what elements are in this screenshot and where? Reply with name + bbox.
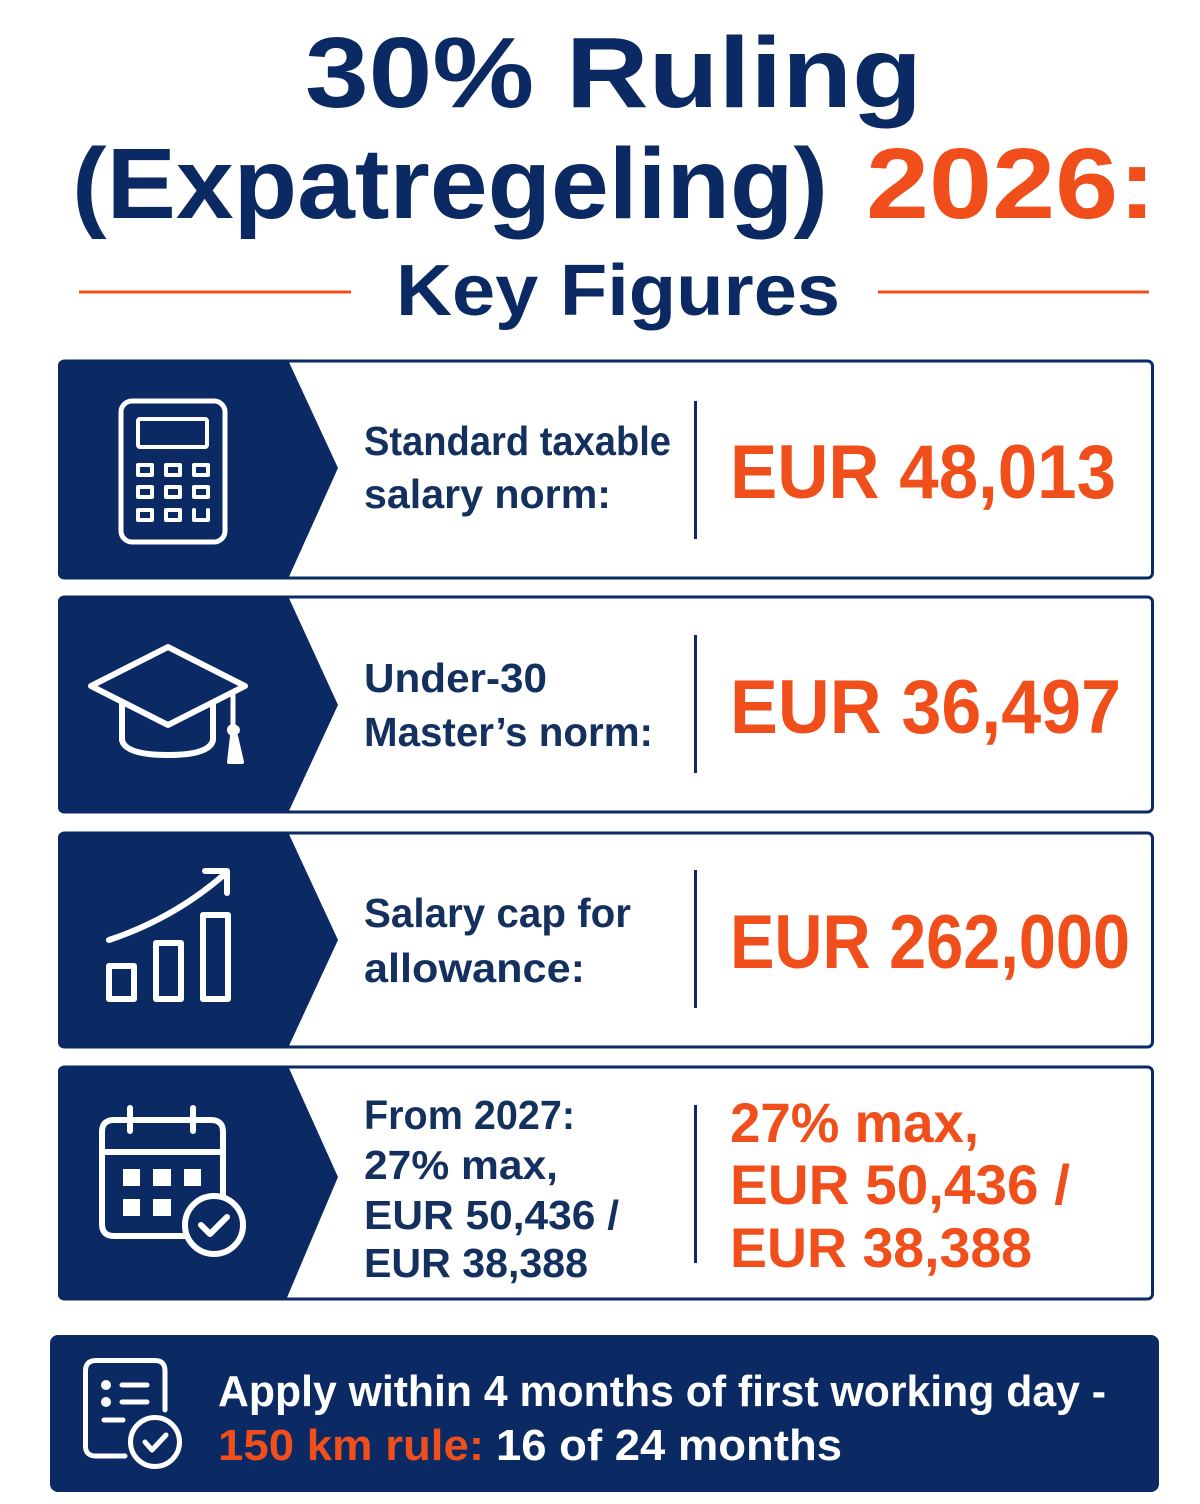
label: salary cap for allowance <box>364 890 631 991</box>
footer text: Apply within 4 months of first working day - <box>218 1367 1106 1416</box>
label: salary cap for allowance: Salary cap for <box>364 890 631 936</box>
value: EUR 36,497: EUR 36,497 <box>730 665 1121 750</box>
value: 27% max, EUR 50,436 / EUR 38,388: EUR 38,388 <box>730 1216 1032 1279</box>
value: 27% max, EUR 50,436 / EUR 38,388: 27% max, <box>730 1091 979 1154</box>
value: EUR 48,013: EUR 48,013 <box>730 430 1116 515</box>
label: standard taxable salary norm: salary norm: <box>364 471 611 517</box>
title: 2026: <box>866 128 1156 240</box>
footer text: 150 km rule: <box>218 1421 484 1470</box>
label: under-30 master's norm: Under-30 <box>364 655 547 701</box>
icon: checklist <box>86 1360 180 1466</box>
panel: under-30 master's norm <box>58 596 1152 813</box>
label: standard taxable salary norm: Standard taxable <box>364 418 671 464</box>
footer text <box>218 1367 1106 1470</box>
label: from 2027: EUR 38,388 <box>364 1240 588 1286</box>
subtitle: key figures: Key Figures <box>396 251 840 331</box>
icon: calendar with check <box>102 1108 243 1254</box>
value: 27% max, EUR 50,436 / EUR 38,388: EUR 50,436 / <box>730 1153 1070 1216</box>
label: under-30 master's norm <box>364 655 653 755</box>
panel: salary cap <box>58 832 1152 1048</box>
panel: standard salary norm <box>58 360 1152 579</box>
icon: graduation cap <box>91 647 245 762</box>
label: from 2027 <box>364 1092 619 1286</box>
footer banner <box>50 1335 1159 1492</box>
label: from 2027: EUR 50,436 / <box>364 1192 619 1238</box>
label: salary cap for allowance: allowance: <box>364 945 585 991</box>
label: from 2027: From 2027: <box>364 1092 575 1138</box>
icon: calculator <box>121 401 225 542</box>
label: under-30 master's norm: Master’s norm: <box>364 709 653 755</box>
label: standard taxable salary norm <box>364 418 671 517</box>
title: (Expatregeling) <box>72 128 828 240</box>
title: 30% Ruling <box>305 17 922 129</box>
value: EUR 262,000: EUR 262,000 <box>730 900 1130 985</box>
title <box>72 17 1156 240</box>
value: 27% max, EUR 50,436 / EUR 38,388 <box>730 1091 1070 1279</box>
panel: from 2027 <box>58 1066 1152 1300</box>
label: from 2027: 27% max, <box>364 1142 558 1188</box>
icon: growth chart <box>109 871 228 999</box>
footer text: 16 of 24 months <box>496 1421 842 1470</box>
